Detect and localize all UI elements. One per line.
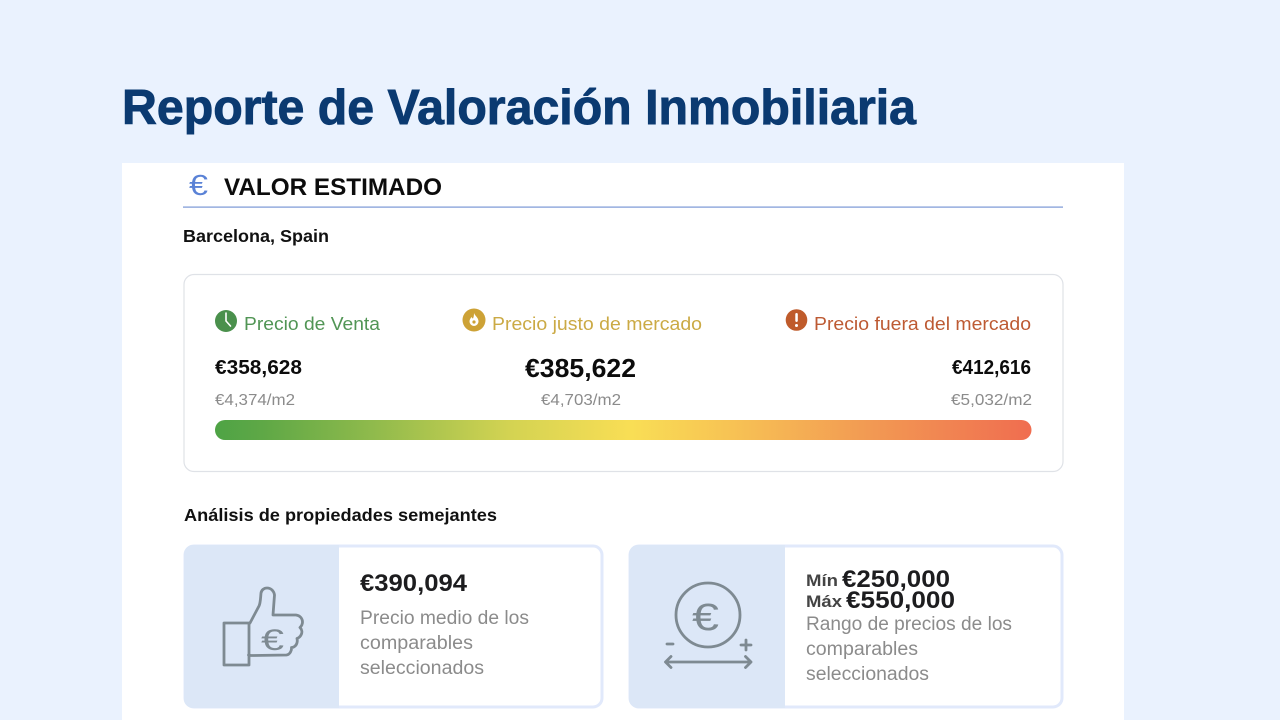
icon: coin with range arrow: €: [692, 597, 719, 639]
max value: €550,000: [846, 587, 955, 614]
average price description: Precio medio de los: [360, 608, 529, 629]
icon: thumbs up with euro: [224, 588, 302, 665]
average price value: €390,094: [360, 570, 468, 597]
icon: thumbs up with euro: €: [261, 624, 284, 657]
average price description: seleccionados: [360, 658, 484, 679]
card: average price: [184, 545, 602, 708]
panel: report sheet: [122, 163, 1124, 720]
value: fair price: €385,622: [525, 353, 636, 383]
per m2: out of market: €5,032/m2: [951, 392, 1032, 409]
average price description: comparables: [360, 633, 473, 654]
average price description: [360, 608, 529, 679]
range description: comparables: [806, 639, 918, 660]
title: Reporte de Valoración Inmobiliaria: [122, 81, 917, 135]
label: precio de venta: Precio de Venta: [244, 314, 381, 334]
range description: Rango de precios de los: [806, 614, 1012, 635]
label: precio fuera del mercado: Precio fuera del mercado: [814, 314, 1031, 334]
label: precio justo de mercado: Precio justo de mercado: [492, 314, 702, 334]
range description: [806, 614, 1012, 685]
per m2: fair: €4,703/m2: [541, 392, 621, 409]
icon: clock: [215, 310, 237, 332]
value: out of market price: €412,616: [952, 357, 1031, 379]
icon: euro: €: [189, 170, 208, 202]
icon: warning: [786, 309, 807, 331]
value: sale price: €358,628: [215, 357, 302, 379]
icon: flame: [462, 308, 486, 332]
heading: valor estimado: VALOR ESTIMADO: [224, 174, 442, 201]
max label: Máx: [806, 592, 843, 611]
per m2: sale: €4,374/m2: [215, 392, 295, 409]
gradient price bar: [215, 420, 1032, 440]
card: price range: [629, 545, 1062, 708]
heading: similar properties: Análisis de propiedades semejantes: [184, 505, 497, 525]
range description: seleccionados: [806, 664, 929, 685]
min value: €250,000: [842, 566, 950, 593]
min label: Mín: [806, 571, 838, 590]
icon: coin with range arrow: [666, 583, 751, 668]
panel: price range: [184, 274, 1063, 472]
location: Barcelona, Spain: [183, 226, 329, 246]
